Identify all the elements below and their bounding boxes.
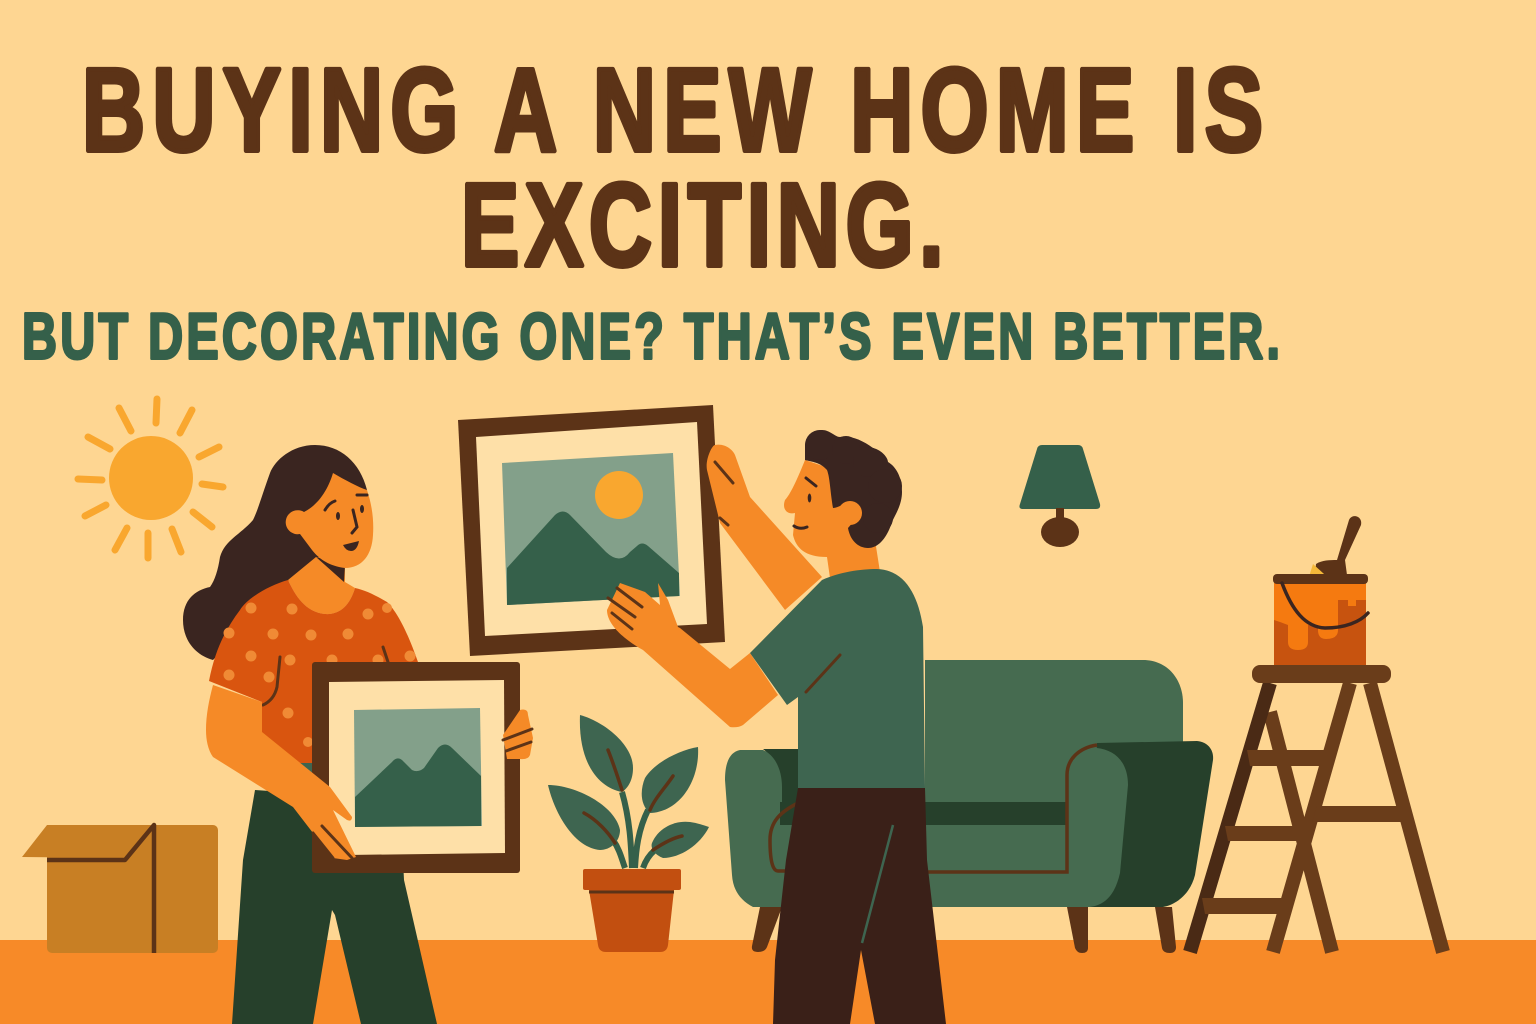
neck [288, 557, 355, 614]
sleeve crease [806, 655, 840, 692]
ladder [1190, 665, 1443, 952]
face [286, 473, 373, 568]
shirt [209, 580, 418, 763]
ear [838, 501, 862, 525]
lower hand finger lines [608, 588, 642, 629]
woman's arm and hands [206, 685, 533, 860]
floor [0, 940, 1536, 1024]
woman [183, 445, 437, 1024]
icon: wall lamp [1019, 445, 1100, 547]
head and neck [784, 460, 880, 578]
sleeve creases [263, 647, 388, 705]
title: EXCITING. [461, 159, 943, 291]
small framed picture [312, 662, 520, 873]
trousers [232, 790, 437, 1024]
hair [183, 445, 367, 660]
lower arm and hand [607, 583, 778, 727]
title: BUYING A NEW HOME IS [82, 44, 1263, 176]
trousers [773, 788, 946, 1024]
subtitle: BUT DECORATING ONE? THAT’S EVEN BETTER. [22, 301, 1280, 373]
shirt dots [224, 602, 416, 747]
neck shadow [316, 557, 345, 582]
man's face details [794, 478, 816, 528]
facial features [325, 495, 367, 551]
waistband [293, 763, 320, 790]
man [607, 430, 946, 1024]
icon: sun [78, 399, 223, 558]
large framed picture [458, 405, 725, 656]
trouser slit [862, 825, 893, 943]
sofa [725, 660, 1213, 953]
paint can with brush [1273, 516, 1368, 665]
title [82, 44, 1263, 291]
shirt [750, 569, 925, 788]
curly hair [805, 430, 902, 548]
potted plant [548, 715, 709, 952]
raised arm and hand [707, 445, 822, 610]
raised hand finger lines [715, 462, 733, 525]
cardboard box [22, 825, 218, 953]
